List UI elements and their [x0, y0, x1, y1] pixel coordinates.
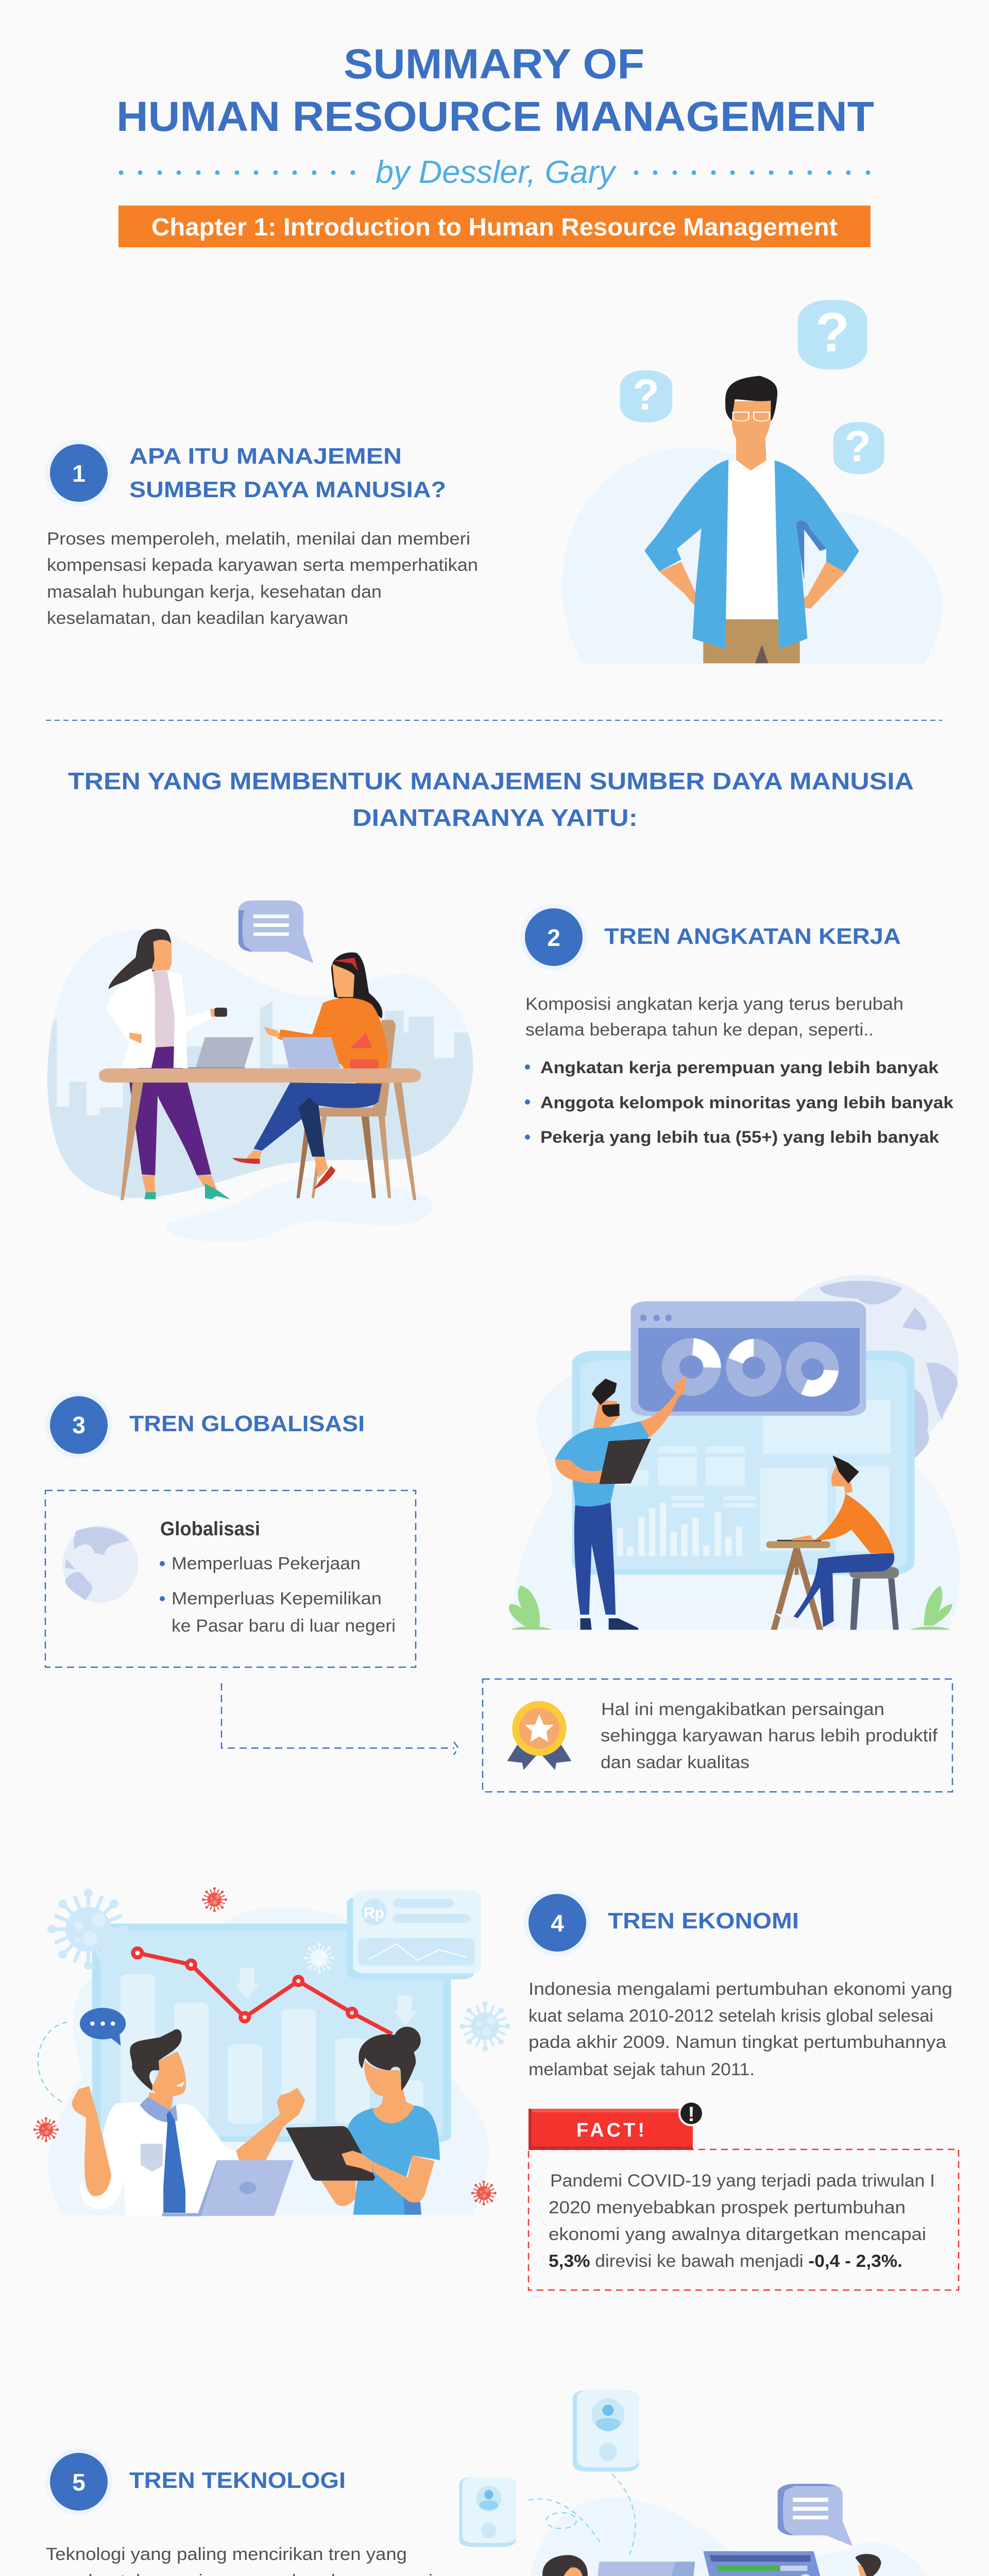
section 5 paragraph: Teknologi yang paling mencirikan tren yang: [46, 2545, 407, 2564]
section 1 heading: SUMBER DAYA MANUSIA?: [129, 477, 446, 502]
fact text: ekonomi yang awalnya ditargetkan mencapai: [549, 2225, 926, 2244]
fact banner: FACT!: [576, 2120, 644, 2141]
section 2 paragraph: selama beberapa tahun ke depan, seperti..: [525, 1020, 874, 1040]
icon: globe: [62, 1526, 138, 1603]
rupiah label: Rp: [364, 1905, 384, 1922]
globalisasi text: ke Pasar baru di luar negeri: [172, 1616, 396, 1636]
author byline: by Dessler, Gary: [376, 155, 617, 190]
section 1 paragraph: Proses memperoleh, melatih, menilai dan memberi: [47, 529, 470, 549]
question marks: ?: [815, 301, 849, 363]
section 2 bullet list: [525, 1058, 953, 1146]
question marks: ?: [633, 370, 659, 419]
section 4 paragraph: [528, 1979, 952, 2079]
fact callout dashed box: [528, 2149, 959, 2290]
icon: award badge: [507, 1701, 571, 1770]
section 1 paragraph: keselamatan, dan keadilan karyawan: [47, 608, 348, 628]
fact text: 5,3% direvisi ke bawah menjadi -0,4 - 2,3%.: [549, 2251, 902, 2271]
section 2 bullet list: Anggota kelompok minoritas yang lebih banyak: [540, 1093, 953, 1112]
section 2 paragraph: Komposisi angkatan kerja yang terus berubah: [525, 994, 903, 1014]
divider: [46, 720, 942, 721]
section 1 number badge: 1: [72, 460, 86, 487]
illustration: red line chart and two people: [38, 1948, 440, 2216]
section 4 number badge: [524, 1889, 591, 1956]
section 4 heading: TREN EKONOMI: [608, 1908, 799, 1934]
question marks: [633, 301, 871, 470]
title: [116, 41, 874, 140]
section 5 number badge: [45, 2448, 112, 2515]
section 3 number badge: 3: [72, 1412, 86, 1438]
author byline: [118, 155, 871, 190]
illustration: falling economy chart: [33, 1887, 510, 2215]
section 1 number badge: [45, 439, 112, 506]
trends heading: DIANTARANYA YAITU:: [352, 804, 638, 831]
trends heading: [68, 768, 914, 831]
section 4 paragraph: kuat selama 2010-2012 setelah krisis global selesai: [528, 2006, 933, 2026]
fact banner: [528, 2100, 704, 2150]
globalisasi text: Memperluas Kepemilikan: [172, 1589, 382, 1608]
chapter banner: Chapter 1: Introduction to Human Resource Management: [151, 214, 838, 241]
section 2 bullet list: Pekerja yang lebih tua (55+) yang lebih banyak: [540, 1128, 939, 1146]
trends heading: TREN YANG MEMBENTUK MANAJEMEN SUMBER DAYA MANUSIA: [68, 768, 914, 794]
fact text: Pandemi COVID-19 yang terjadi pada triwulan I: [550, 2171, 935, 2191]
globalisasi dashed box: [45, 1490, 416, 1667]
illustration: two women at a table: [44, 901, 476, 1242]
section 4 paragraph: Indonesia mengalami pertumbuhan ekonomi yang: [528, 1979, 952, 1999]
illustration: dashboard with two men and globe: [509, 1275, 960, 1630]
section 2 bullet list: Angkatan kerja perempuan yang lebih banyak: [540, 1058, 939, 1077]
dashed arrow: [221, 1683, 458, 1755]
section 2 number badge: 2: [547, 924, 560, 951]
illustration: two employees at computers: [459, 2390, 953, 2576]
fact banner: !: [688, 2103, 695, 2126]
illustration: thinking man with question marks: [562, 300, 942, 664]
section 5 number badge: 5: [72, 2469, 86, 2496]
chapter banner: [118, 206, 871, 247]
fact text: [549, 2171, 935, 2271]
conclusion dashed box: Hal ini mengakibatkan persaingan: [601, 1700, 884, 1719]
section 2 number badge: [520, 904, 587, 971]
section 1 heading: [129, 444, 446, 502]
section 3 heading: TREN GLOBALISASI: [129, 1411, 365, 1436]
globalisasi text: Memperluas Pekerjaan: [172, 1554, 361, 1573]
section 5 paragraph: [46, 2545, 444, 2576]
globalisasi text: [160, 1518, 396, 1636]
title: HUMAN RESOURCE MANAGEMENT: [116, 93, 874, 140]
section 1 heading: APA ITU MANAJEMEN: [129, 444, 402, 469]
section 4 paragraph: pada akhir 2009. Namun tingkat pertumbuhannya: [528, 2032, 946, 2052]
fact text: 2020 menyebabkan prospek pertumbuhan: [549, 2198, 906, 2217]
globalisasi text: Globalisasi: [160, 1518, 260, 1540]
question marks: ?: [844, 422, 871, 470]
title: SUMMARY OF: [344, 41, 644, 88]
section 2 heading: TREN ANGKATAN KERJA: [604, 924, 901, 949]
conclusion dashed box: dan sadar kualitas: [601, 1753, 749, 1772]
section 4 number badge: 4: [551, 1910, 564, 1937]
section 5 heading: TREN TEKNOLOGI: [129, 2468, 346, 2493]
conclusion dashed box: sehingga karyawan harus lebih produktif: [601, 1726, 938, 1745]
section 1 paragraph: masalah hubungan kerja, kesehatan dan: [47, 582, 382, 602]
section 2 paragraph: [525, 994, 903, 1040]
section 1 paragraph: kompensasi kepada karyawan serta memperhatikan: [47, 555, 478, 575]
section 4 paragraph: melambat sejak tahun 2011.: [528, 2060, 755, 2079]
conclusion dashed box: [483, 1679, 952, 1792]
section 1 paragraph: [47, 529, 478, 628]
section 3 number badge: [45, 1392, 112, 1459]
